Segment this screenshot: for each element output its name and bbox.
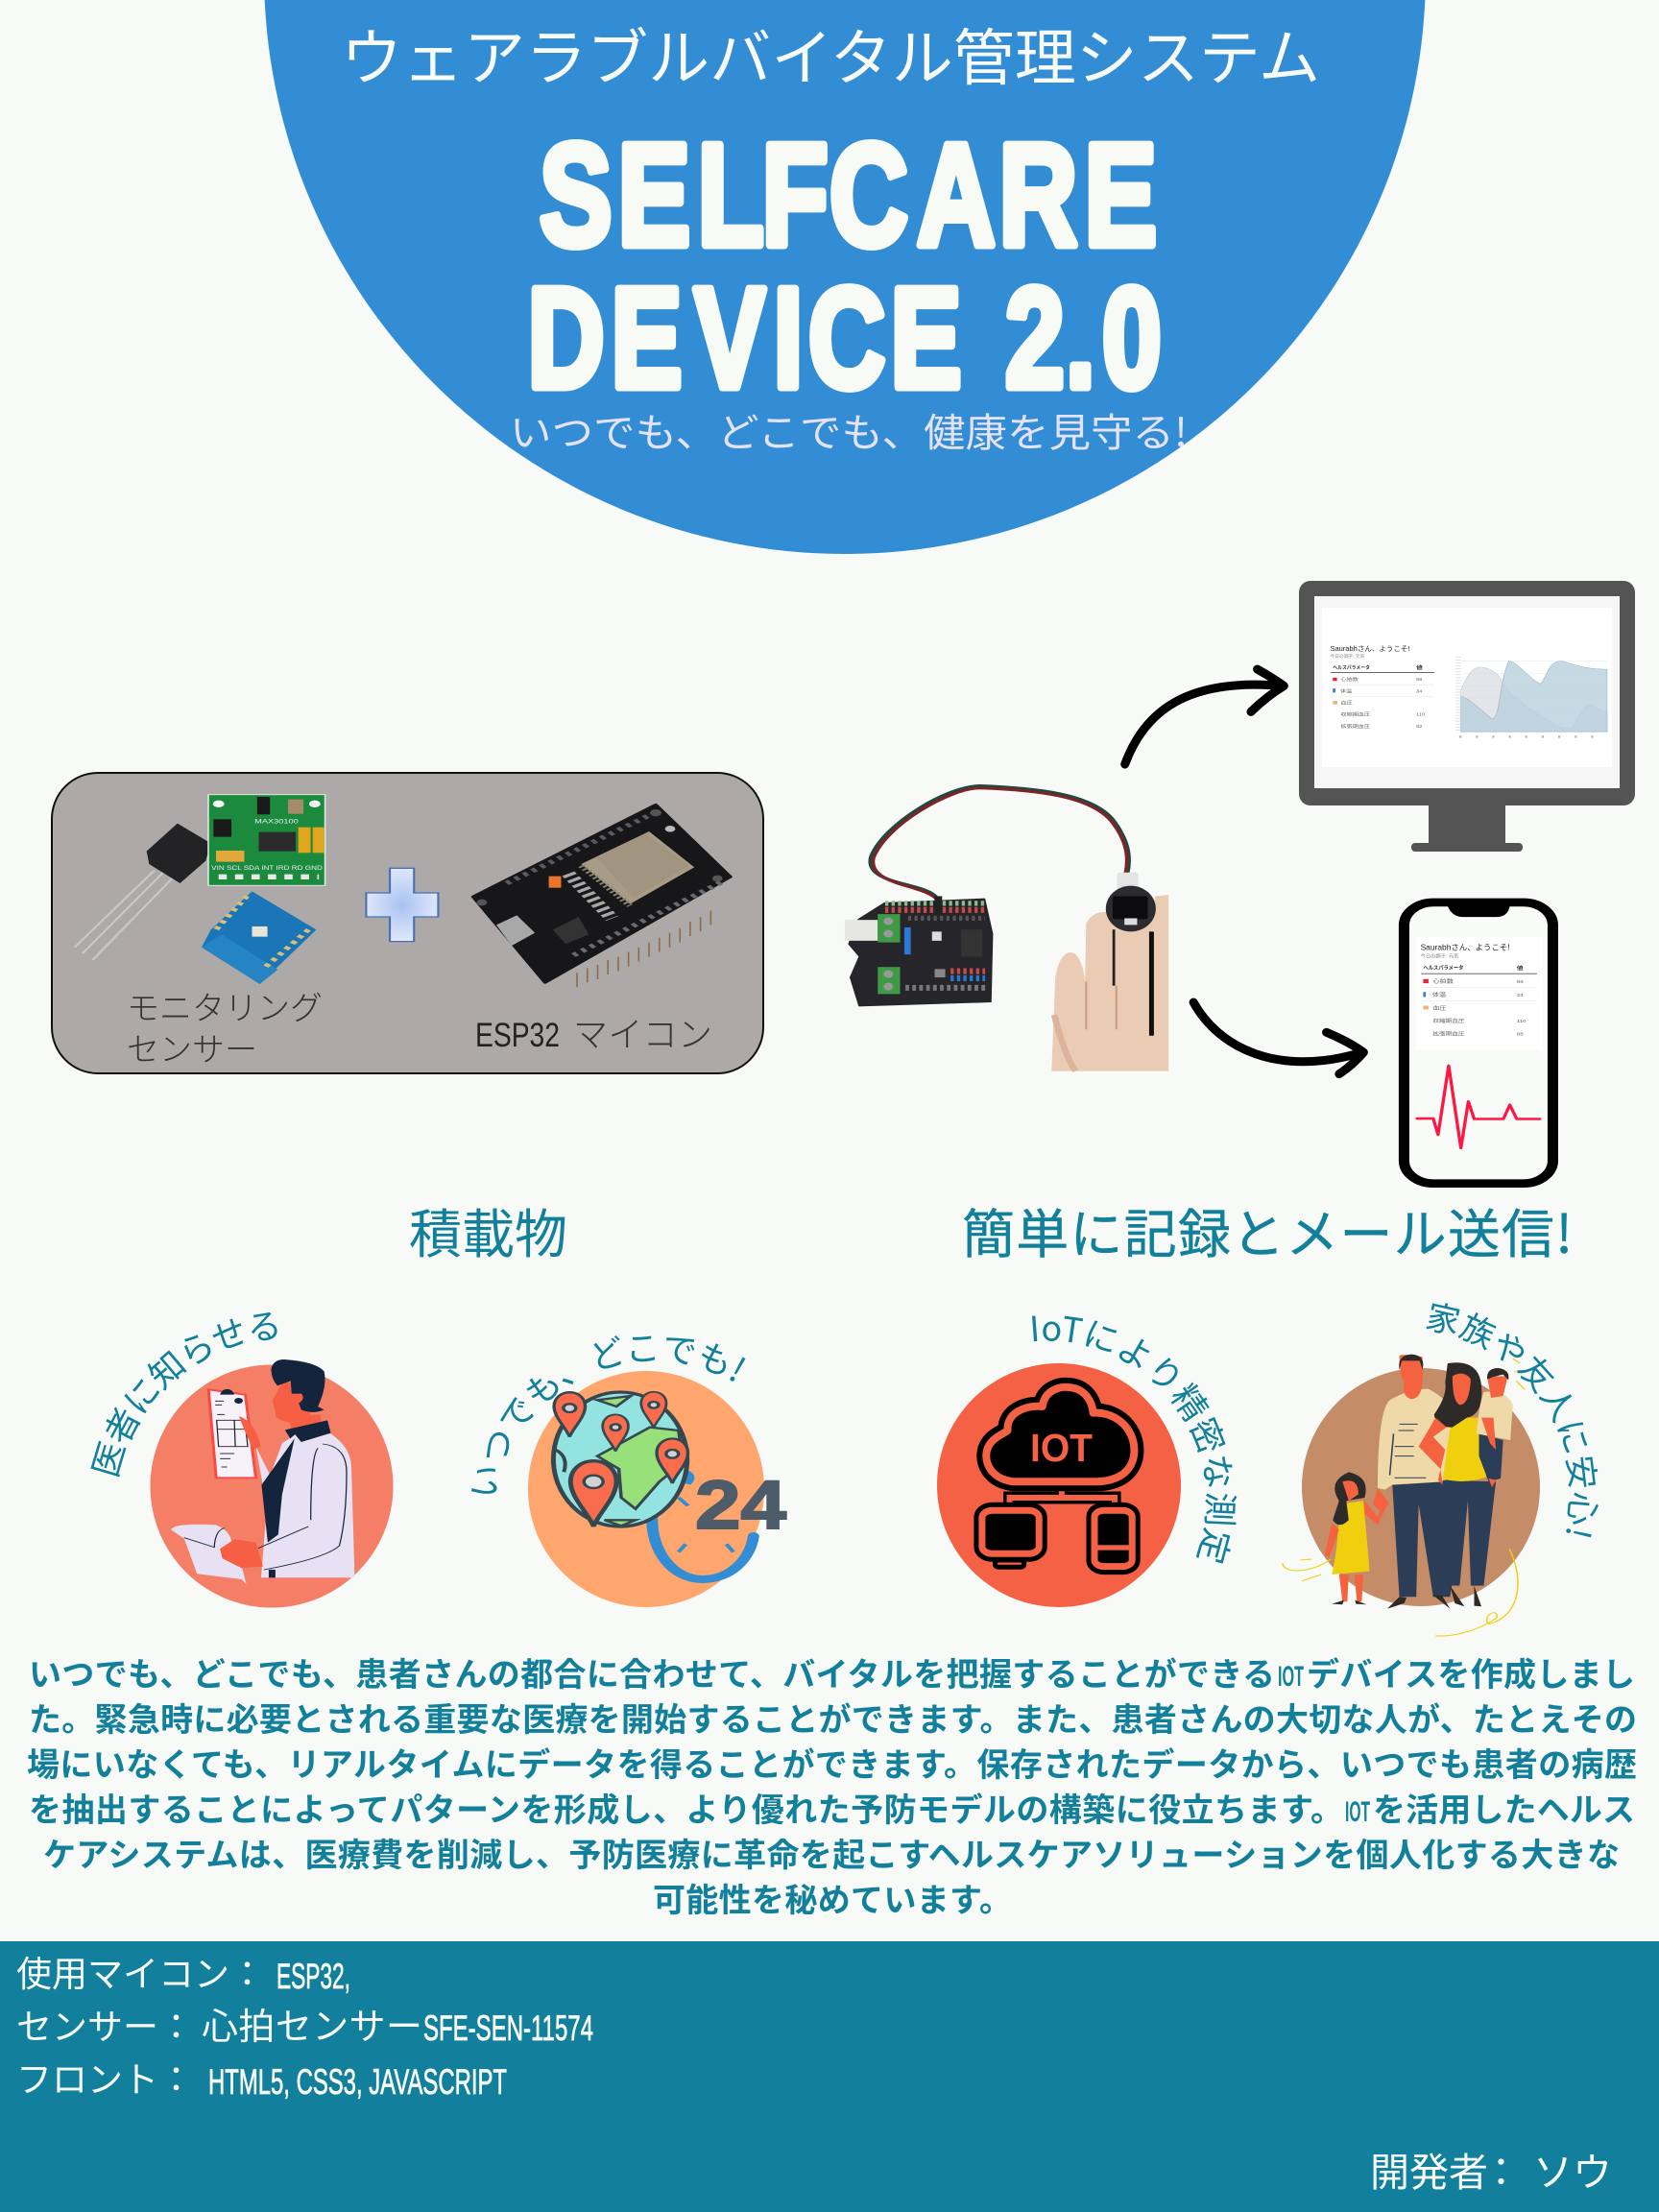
phone dashboard table: Saurabhさん、ようこそ! [1421,943,1510,952]
spec: front end: フロント： [16,2051,194,2103]
dashboard table [1330,645,1434,730]
photo: wearable prototype on hand [845,786,1168,1071]
icon: BMP180 sensor board [202,891,316,984]
dashboard table: 今日の調子: 元気 [1330,653,1365,660]
icon: connecting wire [870,786,1129,900]
dashboard area chart [1458,657,1607,736]
dashboard table: Saurabhさん、ようこそ! [1330,645,1410,653]
phone dashboard table: 34 [1517,993,1524,998]
text block: description: IOT [1345,1796,1370,1828]
subtitle: いつでも、どこでも、健康を見守る! [510,400,1188,458]
phone dashboard table: 88 [1517,1032,1524,1037]
text block: description: デバイスを作成しまし [1307,1648,1635,1695]
arrow: to desktop monitor [1125,669,1284,764]
dashboard table: 82 [1416,724,1423,730]
footer band [0,1941,1659,2212]
dashboard table: 34 [1416,689,1423,694]
phone dashboard table: 体温 [1432,991,1447,998]
dashboard table: 110 [1416,712,1425,717]
feature: precise IoT measurement [937,1315,1237,1607]
icon: plus sign [366,868,438,942]
dashboard table: 体温 [1340,687,1353,694]
yellow swooshes [1283,1358,1525,1636]
arrow: to smartphone [1193,1002,1363,1074]
illustration: globe with pins and 24h clock [553,1392,754,1579]
text block: description: た。緊急時に必要とされる重要な医療を開始することができます。また、患者さんの大切な人が、たとえその [29,1694,1637,1741]
developer credit: ： [1481,2140,1521,2198]
spec: front end: HTML5, CSS3, JAVASCRIPT [208,2062,507,2102]
icon: MAX30100 sensor board [208,795,325,885]
dashboard table: 98 [1416,678,1423,683]
spec: front end [16,2051,507,2103]
icon label: IOT: IOT [1030,1426,1093,1470]
icon: desktop monitor with dashboard [1299,581,1635,852]
label: microcontroller: マイコン [573,1007,712,1057]
curved caption: 医者に知らせる [90,1311,277,1477]
icon: ESP32 board [473,805,731,987]
spec: sensor: SFE-SEN-11574 [423,2008,593,2048]
feature: peace of mind for family [1282,1303,1599,1636]
spec: sensor [16,1997,593,2050]
text block: description [27,1648,1637,1921]
icon: MAX30100 sensor board: MAX30100 [254,818,299,825]
label: ESP32: ESP32 [475,1017,560,1054]
heartbeat line [1416,1066,1541,1148]
father [1373,1355,1467,1609]
text block: description: 場にいなくても、リアルタイムにデータを得ることができます。保存されたデータから、いつでも患者の病歴 [27,1739,1637,1786]
label: monitoring sensor line 2: センサー [127,1023,257,1070]
daughter [1325,1472,1389,1604]
phone dashboard table: 今日の調子: 元気 [1421,952,1458,959]
text block: description: IOT [1278,1661,1304,1693]
heading: easy logging and email: 簡単に記録とメール送信! [962,1191,1573,1268]
phone dashboard table: 98 [1517,980,1524,985]
phone dashboard table: 心拍数 [1432,977,1454,985]
text block: description: を活用したヘルス [1373,1784,1635,1831]
phone dashboard table: 血圧 [1432,1004,1447,1012]
illustration: doctor with clipboard [171,1359,354,1584]
text block: description: ケアシステムは、医療費を削減し、予防医療に革命を起こすヘルスケアソリューションを個人化する大きな [43,1829,1620,1876]
phone dashboard table: 値 [1517,965,1523,972]
mother and son [1419,1362,1513,1606]
curved caption: 家族や友人に安心! [1426,1303,1599,1538]
header: blue semicircle [264,0,1426,554]
feature: anytime anywhere [470,1335,787,1607]
phone dashboard table: 収縮期血圧 [1432,1018,1465,1024]
developer credit: 開発者 [1370,2140,1488,2198]
spec: sensor: 心拍センサー [202,1997,422,2050]
dashboard table: 値 [1416,664,1423,671]
title: SELFCARE: SELFCARE [540,114,1157,276]
developer credit: ソウ [1533,2140,1612,2198]
icon: Arduino shield [845,896,993,1006]
heading: payload: 積載物 [409,1191,567,1268]
phone dashboard table: 拡張期血圧 [1432,1031,1465,1037]
dashboard table: 血圧 [1341,699,1353,706]
dashboard table: 収縮期血圧 [1341,710,1371,717]
spec: microcontroller: ESP32, [276,1957,350,1996]
title: DEVICE 2.0: DEVICE 2.0 [528,258,1162,418]
dashboard table: 心拍数 [1341,676,1358,683]
phone dashboard table: ヘルスパラメータ [1423,964,1463,972]
icon: IoT cloud with devices [982,1387,1134,1567]
curved caption: IoTにより精密な測定 [1032,1315,1237,1564]
icon: MAX30100 sensor board: VIN SCL SDA INT IRD RD GND [211,864,323,871]
text block: description: を抽出することによってパターンを形成し、より優れた予防モデルの構築に役立ちます。 [29,1784,1343,1831]
number: 24 hours: 24 [695,1468,787,1544]
heading: system name: ウェアラブルバイタル管理システム [341,10,1320,98]
spec: microcontroller: 使用マイコン： [16,1945,265,1997]
feature: notify doctor [90,1311,394,1607]
label: monitoring sensor: モニタリング [127,982,323,1029]
spec: sensor: センサー： [16,1998,194,2050]
dashboard table: 拡張期血圧 [1341,723,1371,730]
icon: smartphone with heartbeat [1404,902,1552,1184]
text block: description: 可能性を秘めています。 [653,1874,1012,1921]
icon: hand with finger sensor [1051,873,1168,1071]
text block: description: いつでも、どこでも、患者さんの都合に合わせて、バイタルを把握することができる [29,1648,1275,1695]
curved caption: いつでも、どこでも! [470,1335,745,1494]
phone dashboard table [1416,937,1542,1049]
phone dashboard table: 110 [1517,1019,1527,1024]
illustration: family [1283,1355,1525,1636]
dashboard table: ヘルスパラメータ [1333,664,1370,671]
icon: temperature sensor [75,824,211,960]
panel: onboard components [52,773,763,1073]
